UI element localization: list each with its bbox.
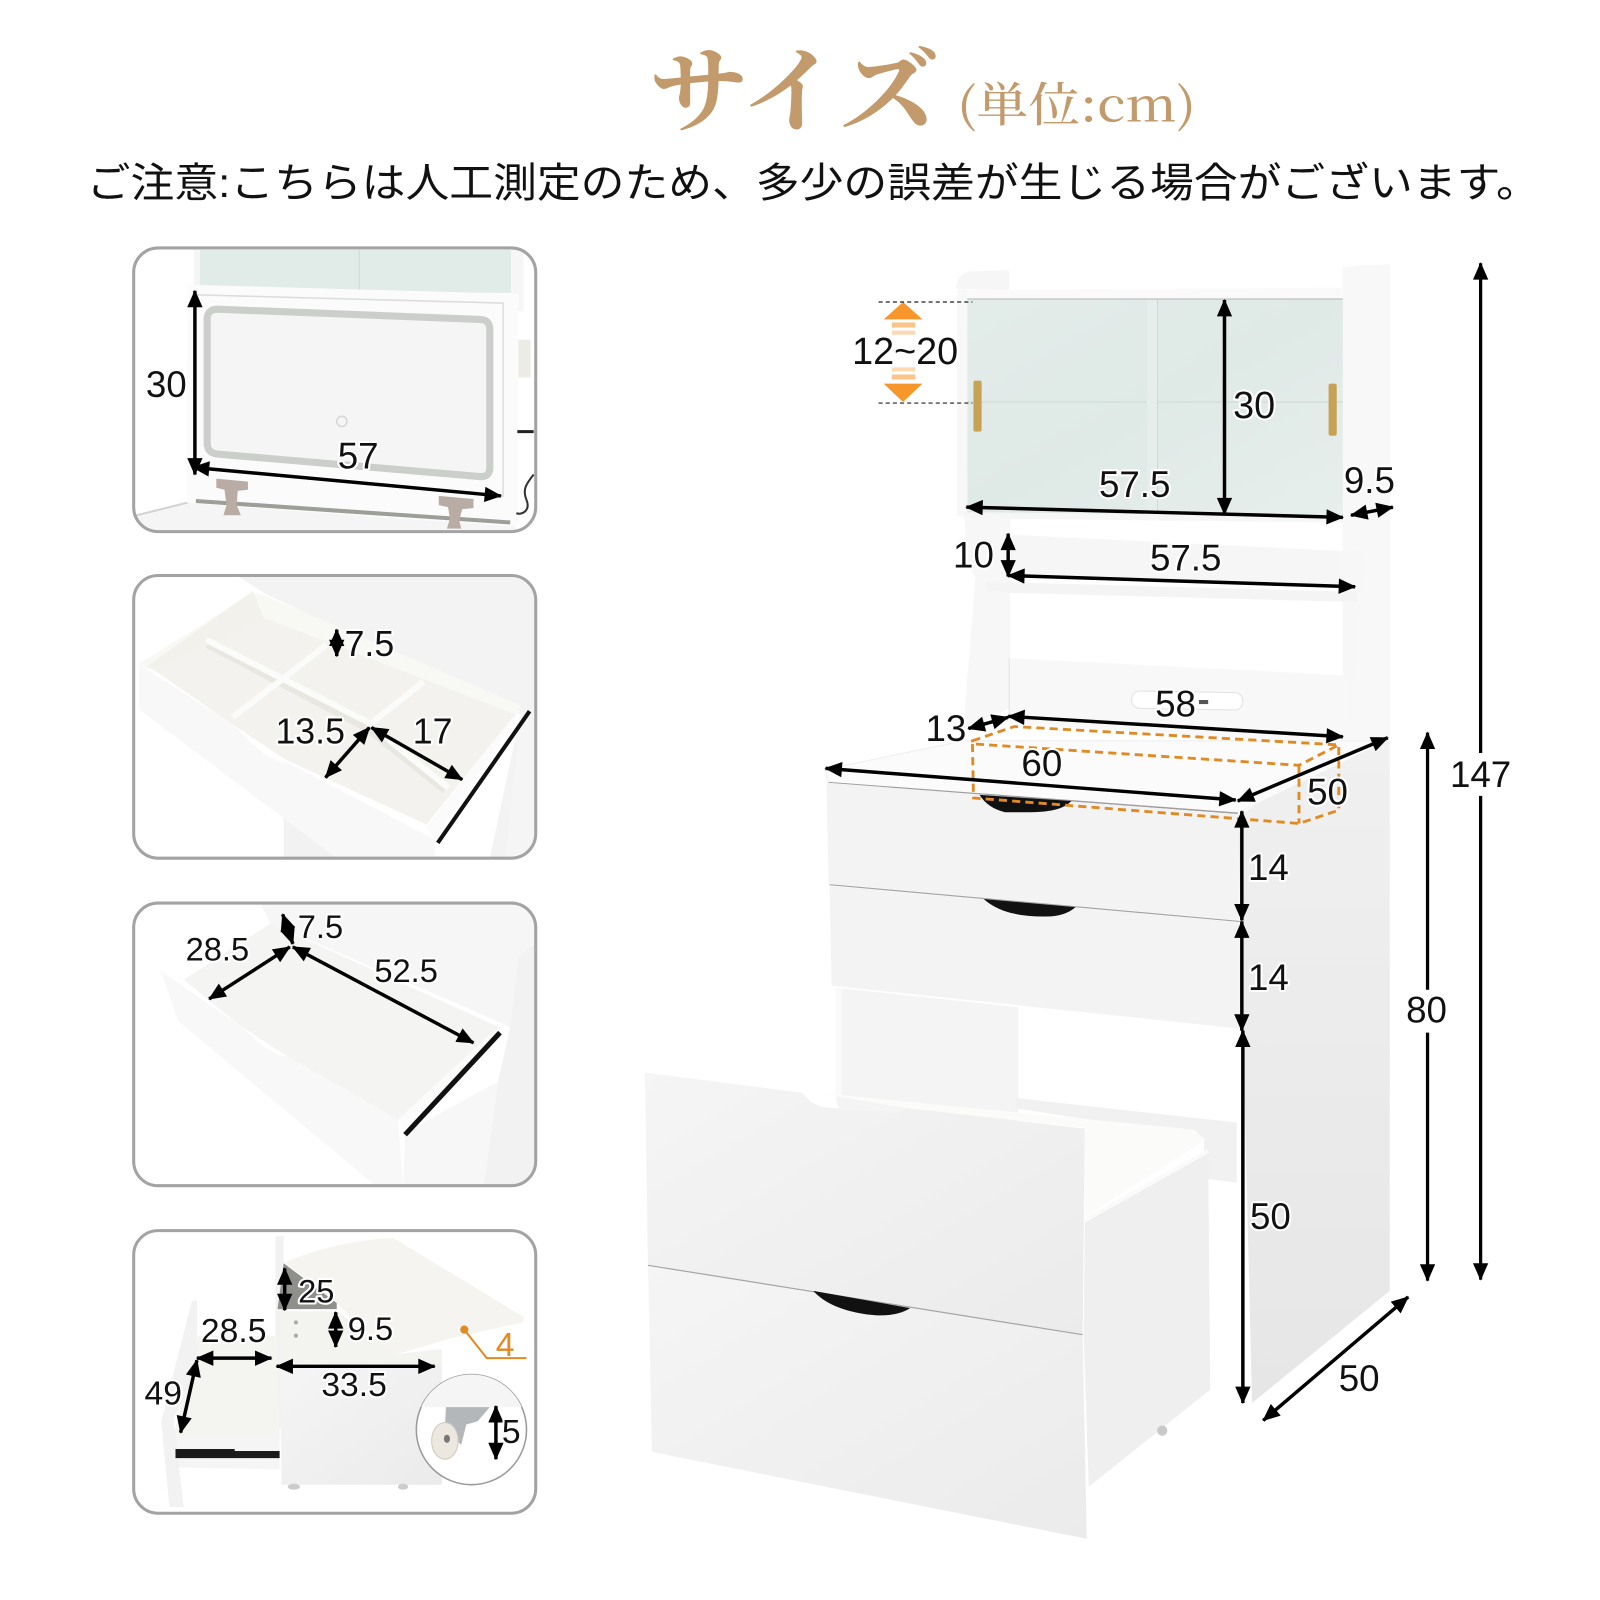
cabinet top drawer [260,903,536,1028]
label: 10: 10 [953,535,994,576]
drawer lip [173,1436,280,1469]
cabinet top frame [957,288,1343,299]
slide rail [438,711,530,843]
dividers [207,645,445,791]
drawer front panel [161,1300,197,1507]
desktop [824,741,1388,813]
label: 9.5: 9.5 [1344,460,1395,501]
title [649,16,1196,151]
label: 60: 60 [1021,743,1062,784]
lower back panel [1009,658,1349,745]
label: 12~20: 12~20 [852,330,958,372]
panel: stool storage [134,1231,536,1513]
drawer floor [184,923,500,1119]
panel: plain drawer [134,903,536,1186]
main dimension arrows [826,263,1481,1420]
label: 57.5 upper: 57.5 [1099,464,1170,505]
orange height arrows [879,302,972,403]
side panel [1238,264,1390,1403]
drawer 2 [830,886,1240,1029]
stool front upper [645,1072,1085,1335]
caster inset [416,1374,527,1485]
mirror door [186,285,478,504]
side rim [427,707,522,840]
slide rail [176,1449,280,1458]
label: 28.5: 28.5 [201,1313,266,1350]
upper right post [1343,265,1390,750]
panel border [134,576,536,858]
label: 5: 5 [502,1414,521,1451]
label: 49: 49 [145,1375,182,1412]
LED frame [207,309,490,477]
orange callout [460,1326,527,1364]
dimension arrows [335,630,338,656]
orange callout: 4 [496,1327,514,1364]
left strip [957,290,967,516]
shelf [986,582,1357,602]
label: 13: 13 [925,708,966,749]
panel border [134,903,536,1186]
drawer front [139,664,435,858]
cabinet behind [237,576,536,858]
label: 147: 147 [1450,754,1511,795]
label: 57: 57 [338,436,379,477]
touch icon [337,416,347,427]
cushion lid [285,1238,524,1354]
label: 7.5: 7.5 [298,908,343,945]
label: 7.5: 7.5 [345,624,394,664]
stool side [1084,1153,1210,1487]
dimension arrows [283,1268,286,1310]
box front [280,1363,442,1485]
drawer front [160,970,403,1186]
label: 50 depth bottom: 50 [1339,1358,1380,1399]
USB strip [1131,691,1243,710]
shelf back [1010,535,1343,587]
pulled drawer floor [173,1336,280,1438]
panel: divided drawer [134,576,536,858]
dimension arrows [283,914,293,944]
modesty strip [1015,1098,1237,1183]
slide rail [405,1033,500,1135]
label: 80: 80 [1406,990,1447,1031]
glass cabinet behind mirror [200,250,511,293]
drawer floor [153,617,515,824]
label: 30: 30 [1233,384,1275,426]
table top strip [138,504,517,530]
panel border [134,1231,536,1513]
label: 14 lower: 14 [1248,957,1289,998]
drawer interior walls [139,593,520,716]
gold handles [973,381,982,432]
label: 50 height: 50 [1250,1196,1291,1237]
title: (単位:cm) [957,68,1196,135]
feet [288,1484,300,1490]
orange dashed seat storage box [972,727,1339,823]
label: 33.5: 33.5 [321,1367,387,1404]
label: 9.5: 9.5 [348,1310,393,1347]
stool cushion [816,1093,1205,1217]
stool front lower [648,1265,1087,1539]
cabinet bottom frame [964,512,1343,522]
drawer 1 [827,783,1239,920]
hinges [216,479,473,529]
label: 13.5: 13.5 [275,712,345,752]
label: 52.5: 52.5 [374,952,438,989]
panel border [134,248,536,532]
label: 17: 17 [413,712,453,752]
label: 25: 25 [298,1272,334,1309]
inner box wall [284,1312,442,1363]
under-desk back panel [836,988,1018,1122]
glass doors [967,299,1343,515]
label: 58: 58 [1155,684,1196,725]
back panel [276,1236,284,1429]
label: 57.5 shelf: 57.5 [1150,538,1221,579]
notice text: ご注意:こちらは人工測定のため、多少の誤差が生じる場合がございます。 [87,160,1540,206]
upper left cap [956,270,1009,290]
label: 50 depth top: 50 [1307,771,1348,812]
panel: mirror detail [134,248,536,532]
label: 28.5: 28.5 [186,930,249,967]
furniture: vanity and stool [645,264,1390,1539]
label: 30: 30 [146,364,187,405]
rim [432,1030,496,1088]
right edge bits [518,340,531,378]
label: 14 upper: 14 [1248,847,1289,888]
right bracket [1343,549,1364,741]
left bracket [963,517,1010,729]
dark shadow [278,1263,337,1309]
title: サイズ [649,16,939,151]
dimension arrows [193,291,197,474]
